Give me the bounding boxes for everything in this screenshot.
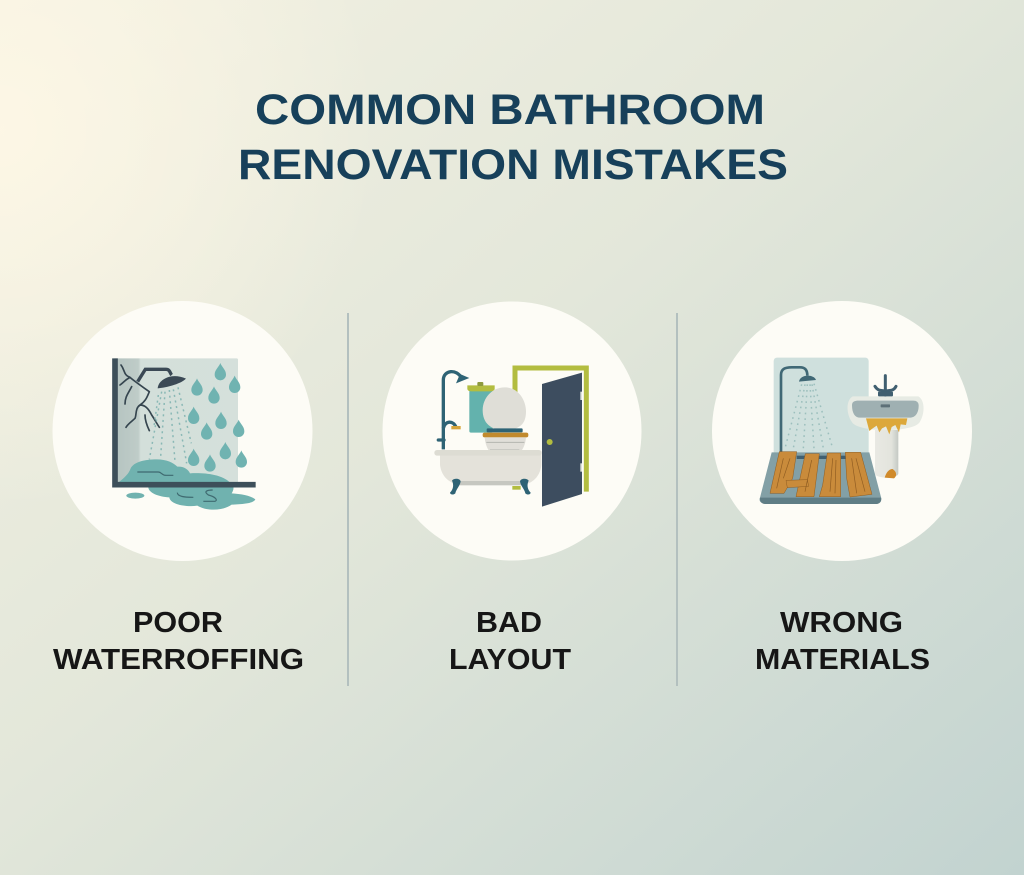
icon: cramped bathroom (434, 368, 586, 507)
icon circle: bad layout (382, 302, 642, 560)
shower wall (774, 358, 869, 458)
shower pipe and head (781, 367, 807, 452)
title (238, 86, 788, 189)
water drops (188, 363, 247, 472)
shower head (138, 369, 172, 382)
sink basin (848, 396, 924, 430)
faucet (875, 376, 896, 395)
icon circle: poor waterproofing (52, 301, 312, 561)
label: bad layout (449, 607, 571, 676)
title: COMMON BATHROOM (255, 86, 765, 134)
shower spray (149, 387, 191, 463)
panel: poor waterproofing (52, 301, 312, 676)
icon circle: wrong materials (712, 301, 972, 561)
toilet lid (483, 387, 526, 430)
shower spray (785, 384, 833, 448)
label: wrong materials: MATERIALS (755, 644, 930, 676)
puddle below floor (148, 486, 255, 510)
label: bad layout: LAYOUT (449, 644, 571, 676)
puddle on wall side (118, 459, 230, 483)
panel: wrong materials (712, 301, 972, 676)
bathtub feet (450, 479, 461, 495)
sink pedestal (875, 430, 898, 478)
cistern (469, 389, 493, 433)
label: wrong materials: WRONG (780, 607, 903, 639)
wall cracks (120, 365, 159, 431)
label: poor waterproofing (53, 607, 304, 676)
floor tray (760, 452, 881, 503)
label: wrong materials (755, 607, 930, 676)
label: poor waterproofing: WATERROFFING (53, 644, 304, 676)
rust stain (866, 418, 907, 434)
toilet bowl (485, 437, 526, 459)
wall and floor frame (115, 358, 256, 485)
toilet seat (487, 428, 523, 432)
icon: leaking shower wall (113, 358, 256, 510)
panel: bad layout (382, 302, 642, 676)
bathtub (440, 453, 541, 485)
label: bad layout: BAD (476, 607, 542, 639)
title: RENOVATION MISTAKES (238, 141, 788, 189)
door (542, 373, 582, 507)
shower fixture (438, 372, 462, 449)
door frame (515, 368, 586, 492)
label: poor waterproofing: POOR (133, 607, 223, 639)
icon: shower, sink and warped floor (760, 358, 924, 504)
warped wooden planks (770, 452, 872, 497)
